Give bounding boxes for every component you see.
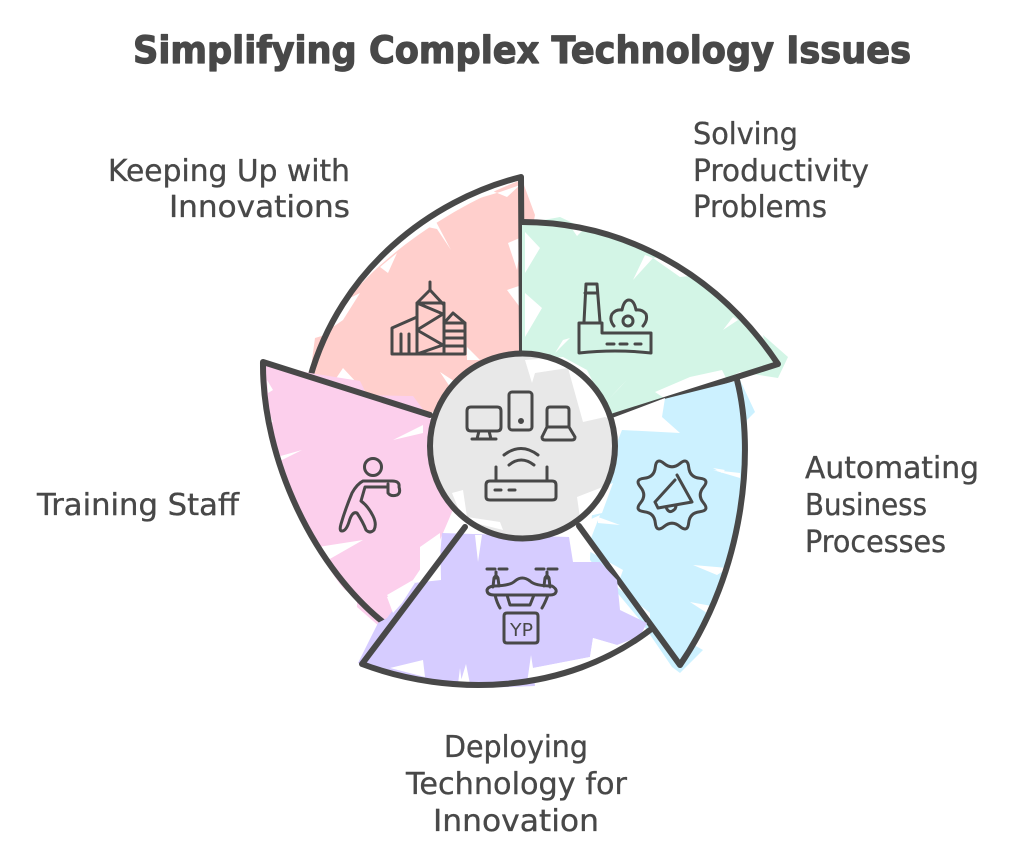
- icon: factory with gear: [579, 284, 651, 353]
- icon: monitor: [467, 407, 501, 439]
- label: keeping up with innovations: [108, 154, 350, 225]
- label: deploying technology for innovation: Technology for: [405, 767, 628, 802]
- label: solving productivity problems: Problems: [693, 190, 827, 225]
- label: solving productivity problems: [693, 117, 869, 225]
- icon: phone button: [520, 420, 522, 422]
- icon: devices and router: [467, 392, 575, 500]
- segment: automating business processes (blue): [578, 380, 755, 673]
- segment: solving productivity problems (green): [522, 217, 788, 420]
- label: deploying technology for innovation: Innovation: [433, 804, 599, 839]
- label: solving productivity problems: Productivity: [693, 154, 869, 189]
- icon: boxing figure: [340, 458, 400, 532]
- label: automating business processes: [805, 451, 979, 560]
- label: deploying technology for innovation: Deploying: [444, 730, 588, 765]
- central hub circle: [430, 354, 615, 538]
- segment: deploying technology for innovation (purple): [358, 527, 650, 688]
- title: Simplifying Complex Technology Issues: [133, 29, 911, 72]
- icon: gear with megaphone: [638, 461, 706, 529]
- icon: wifi waves: [504, 448, 538, 465]
- label: automating business processes: Business: [805, 488, 927, 523]
- label: solving productivity problems: Solving: [693, 117, 798, 152]
- label: keeping up with innovations: Innovations: [169, 190, 350, 225]
- icon: phone: [509, 392, 532, 430]
- icon: router: [486, 467, 556, 500]
- icon: laptop: [542, 407, 575, 440]
- icon: office buildings: [392, 282, 465, 354]
- label: deploying technology for innovation: [405, 730, 628, 839]
- label: automating business processes: Automating: [805, 451, 979, 486]
- label: training staff: Training Staff: [36, 488, 240, 523]
- icon label: drone parcel: YP: [509, 620, 533, 641]
- label: keeping up with innovations: Keeping Up with: [108, 154, 350, 189]
- label: automating business processes: Processes: [805, 525, 946, 560]
- segment: training staff (pink): [263, 362, 470, 632]
- icon: delivery drone: [487, 569, 557, 643]
- segment: keeping up with innovations (red): [310, 177, 535, 415]
